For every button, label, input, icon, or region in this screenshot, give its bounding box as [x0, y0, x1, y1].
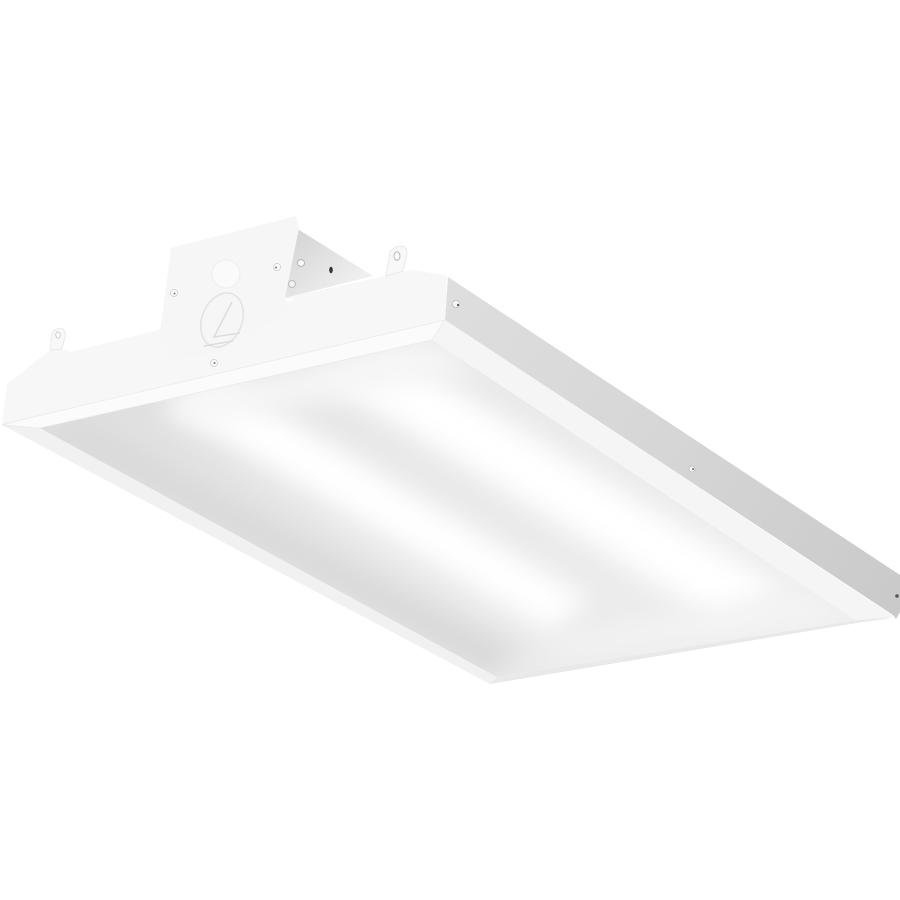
light stripe 2: [358, 382, 766, 606]
side plate inner white strip: [418, 320, 893, 623]
side plate screw end: [895, 594, 899, 598]
mounting bracket plate: [160, 216, 299, 366]
outer frame bottom: [490, 617, 893, 684]
bracket screw right: [274, 264, 280, 270]
right side plate: [445, 277, 900, 619]
bracket screw left: [170, 290, 178, 296]
lens shaded lower-left edge: [200, 497, 508, 674]
side plate screw middle: [689, 466, 695, 472]
lens top glow: [252, 348, 450, 405]
lens lower-right highlight: [540, 590, 850, 660]
front lower fold band: [2, 320, 445, 428]
side plate screw top: [452, 300, 460, 308]
illustration: LED high bay fixture: [2, 216, 900, 684]
hanging tab left: [50, 328, 65, 350]
junction box rear side: [285, 228, 373, 298]
hanging tab right: [386, 246, 407, 276]
bracket screw bottom: [210, 360, 218, 366]
embossed logo: [193, 287, 251, 353]
light stripe 1: [182, 410, 580, 628]
front face panel: [2, 270, 447, 425]
diffuser lens: [40, 340, 847, 677]
left frame strip: [2, 425, 497, 684]
bracket knockout circle: [212, 260, 240, 288]
